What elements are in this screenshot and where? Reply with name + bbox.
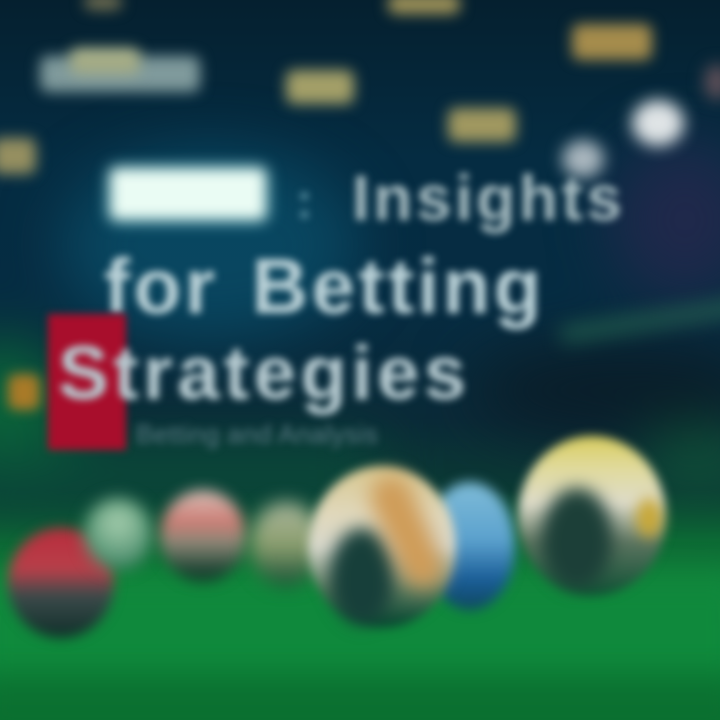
ball: pale small [250, 502, 322, 586]
pitch vignette [0, 675, 720, 720]
red badge [48, 314, 126, 450]
ball: large yellow white [510, 428, 674, 602]
ball: large orange white [302, 458, 463, 634]
title line 3: Strategies [58, 331, 470, 416]
subtitle: Betting and Analysis [136, 419, 378, 449]
ball: small green white [84, 498, 152, 570]
orange marker [8, 374, 40, 410]
ball: far left red [0, 519, 122, 646]
title colon: : [296, 173, 313, 229]
stand green strip [560, 297, 720, 343]
title line 2: for Betting [104, 242, 545, 330]
football balls [0, 428, 674, 646]
title line 1: Insights [352, 162, 625, 234]
ball: blue [425, 482, 515, 610]
ball: pink white [151, 479, 254, 590]
stadium lights [0, 0, 720, 188]
pitch [0, 575, 720, 720]
title highlight block [110, 168, 266, 220]
